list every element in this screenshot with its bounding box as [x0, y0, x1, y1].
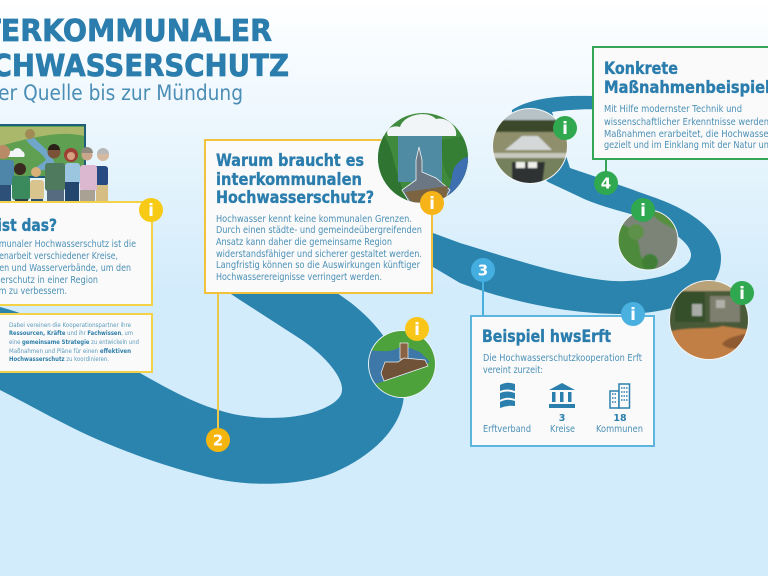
panel: beispiel hwserft: Die Hochwasserschutzkooperation Erft	[483, 353, 642, 364]
connector: step 2	[217, 293, 219, 432]
panel: beispiel hwserft: 3	[559, 413, 565, 424]
panel: warum interkommunaler hochwasserschutz: Ansatz kann daher die gemeinsame Region	[216, 237, 392, 248]
panel: warum interkommunaler hochwasserschutz: interkommunalen	[216, 170, 362, 189]
connector: step 4	[605, 159, 607, 175]
panel: beispiel hwserft	[471, 316, 654, 446]
icon: info badge green flood	[730, 281, 754, 305]
panel: warum interkommunaler hochwasserschutz	[205, 140, 432, 293]
icon: info badge yellow: i	[148, 201, 154, 221]
panel: warum interkommunaler hochwasserschutz: Durch einen städte- und gemeindeübergreifenden	[216, 225, 422, 236]
icon: kreise building	[549, 383, 575, 408]
person 2	[12, 163, 30, 208]
panel: warum interkommunaler hochwasserschutz: widerstandsfähiger und sicherer gestaltet werden.	[216, 249, 422, 260]
panel: was ist das	[0, 202, 152, 305]
step marker 3: 3	[478, 262, 488, 280]
icon: info badge blue	[621, 302, 645, 326]
photo: river channel aerial	[618, 210, 678, 270]
person 4	[45, 144, 65, 208]
panel: kooperationspartner: Dabei vereinen die Kooperationspartner ihre	[9, 322, 131, 329]
step marker 2	[206, 428, 230, 452]
connector: step 3	[482, 275, 484, 316]
icon: info badge castle	[405, 317, 429, 341]
illustration: community in front of map	[0, 125, 109, 208]
panel: kooperationspartner: Ressourcen, Kräfte und ihr Fachwissen, um	[9, 330, 133, 337]
icon: kommunen high-rise	[610, 384, 630, 408]
panel: warum interkommunaler hochwasserschutz: Warum braucht es	[216, 151, 364, 170]
panel: warum interkommunaler hochwasserschutz: Hochwasser kennt keine kommunalen Grenzen.	[216, 214, 412, 225]
title	[0, 14, 289, 105]
panel: kooperationspartner: eine gemeinsame Strategie zu entwickeln und	[9, 339, 139, 346]
icon: info badge orange: i	[429, 194, 435, 214]
panel: konkrete massnahmenbeispiele: Konkrete	[604, 59, 678, 78]
river: upper right bend	[415, 96, 721, 314]
illustration: rain over city	[378, 112, 470, 204]
illustration: castle by river	[368, 330, 436, 398]
panel: beispiel hwserft: vereint zurzeit:	[483, 365, 543, 376]
panel: beispiel hwserft: Kreise	[550, 424, 575, 435]
icon: info badge blue: i	[630, 305, 636, 325]
panel: kooperationspartner	[0, 314, 152, 372]
icon: info badge green channel: i	[640, 201, 646, 221]
person 3	[30, 167, 44, 208]
photo: retention dam	[492, 108, 568, 186]
panel: kooperationspartner: Maßnahmen und Pläne für einen effektiven	[9, 348, 131, 355]
step marker 2: 2	[213, 432, 223, 450]
icon: info badge yellow	[139, 198, 163, 222]
photo: flooded town	[668, 280, 750, 360]
icon: info badge green dam	[553, 116, 577, 140]
panel: beispiel hwserft: Kommunen	[596, 424, 643, 435]
panel: beispiel hwserft: 18	[613, 413, 627, 424]
icon: erftverband water	[500, 383, 515, 408]
river: lower left bend	[0, 260, 404, 484]
person 7	[93, 148, 109, 208]
panel: warum interkommunaler hochwasserschutz: Hochwasserschutz?	[216, 188, 374, 207]
step marker 4	[594, 171, 618, 195]
person 1	[0, 145, 14, 208]
icon: info badge orange	[420, 191, 444, 215]
panel: warum interkommunaler hochwasserschutz: Langfristig können so die Auswirkungen künftiger	[216, 260, 420, 271]
icon: info badge green channel	[631, 198, 655, 222]
step marker 4: 4	[601, 174, 611, 192]
panel: beispiel hwserft: Erftverband	[483, 424, 531, 435]
panel: konkrete massnahmenbeispiele	[593, 47, 768, 159]
panel: beispiel hwserft: Beispiel hwsErft	[482, 327, 611, 346]
step marker 3	[471, 258, 495, 282]
panel: warum interkommunaler hochwasserschutz: Hochwasserereignisse verringert werden.	[216, 272, 382, 283]
person 5	[64, 148, 80, 208]
icon: info badge green flood: i	[739, 284, 745, 304]
icon: info badge green dam: i	[562, 119, 568, 139]
panel: konkrete massnahmenbeispiele: Mit Hilfe modernster Technik und	[604, 104, 742, 115]
panel: kooperationspartner: Hochwasserschutz zu koordinieren.	[9, 356, 109, 363]
person 6	[80, 147, 97, 208]
icon: info badge castle: i	[414, 320, 420, 340]
